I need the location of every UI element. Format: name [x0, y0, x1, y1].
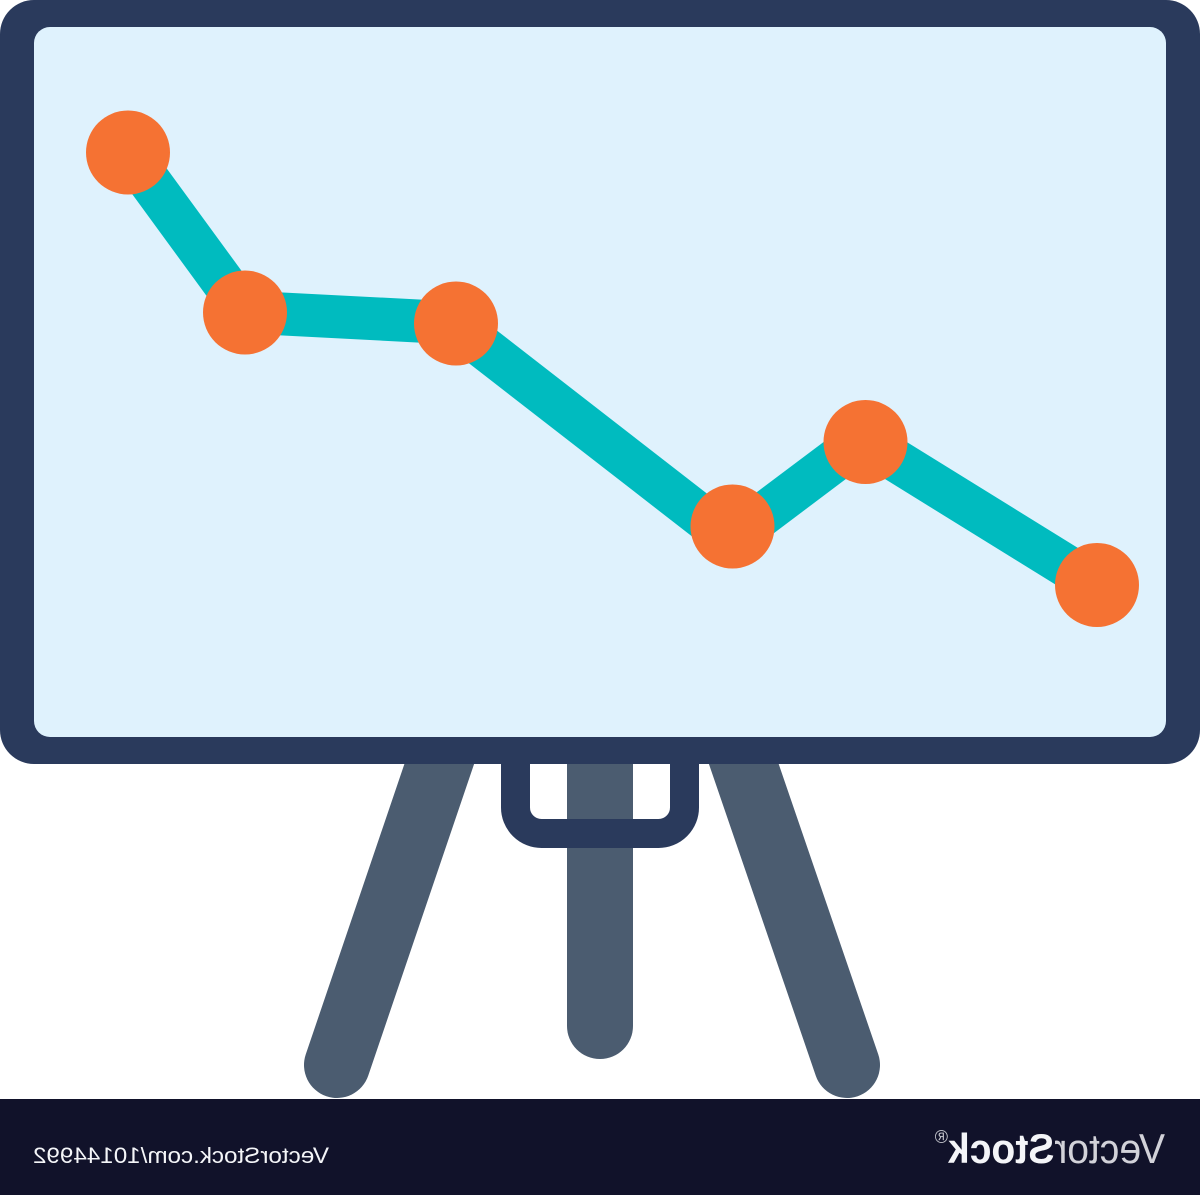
board frame	[0, 0, 1200, 764]
centre leg	[567, 750, 633, 1026]
line chart	[86, 110, 1139, 627]
left leg	[337, 750, 444, 1065]
footer url (mirrored): VectorStock.com/10144992	[33, 1143, 329, 1168]
footer bar	[0, 1099, 1200, 1195]
data points	[86, 110, 1139, 627]
right leg	[739, 750, 847, 1065]
easel legs	[337, 750, 847, 1065]
footer logo (mirrored): VectorStock	[947, 1125, 1165, 1172]
board screen	[34, 27, 1166, 737]
registered mark (mirrored): ®	[935, 1127, 948, 1147]
bracket	[516, 755, 684, 834]
chart line	[128, 152, 1097, 585]
